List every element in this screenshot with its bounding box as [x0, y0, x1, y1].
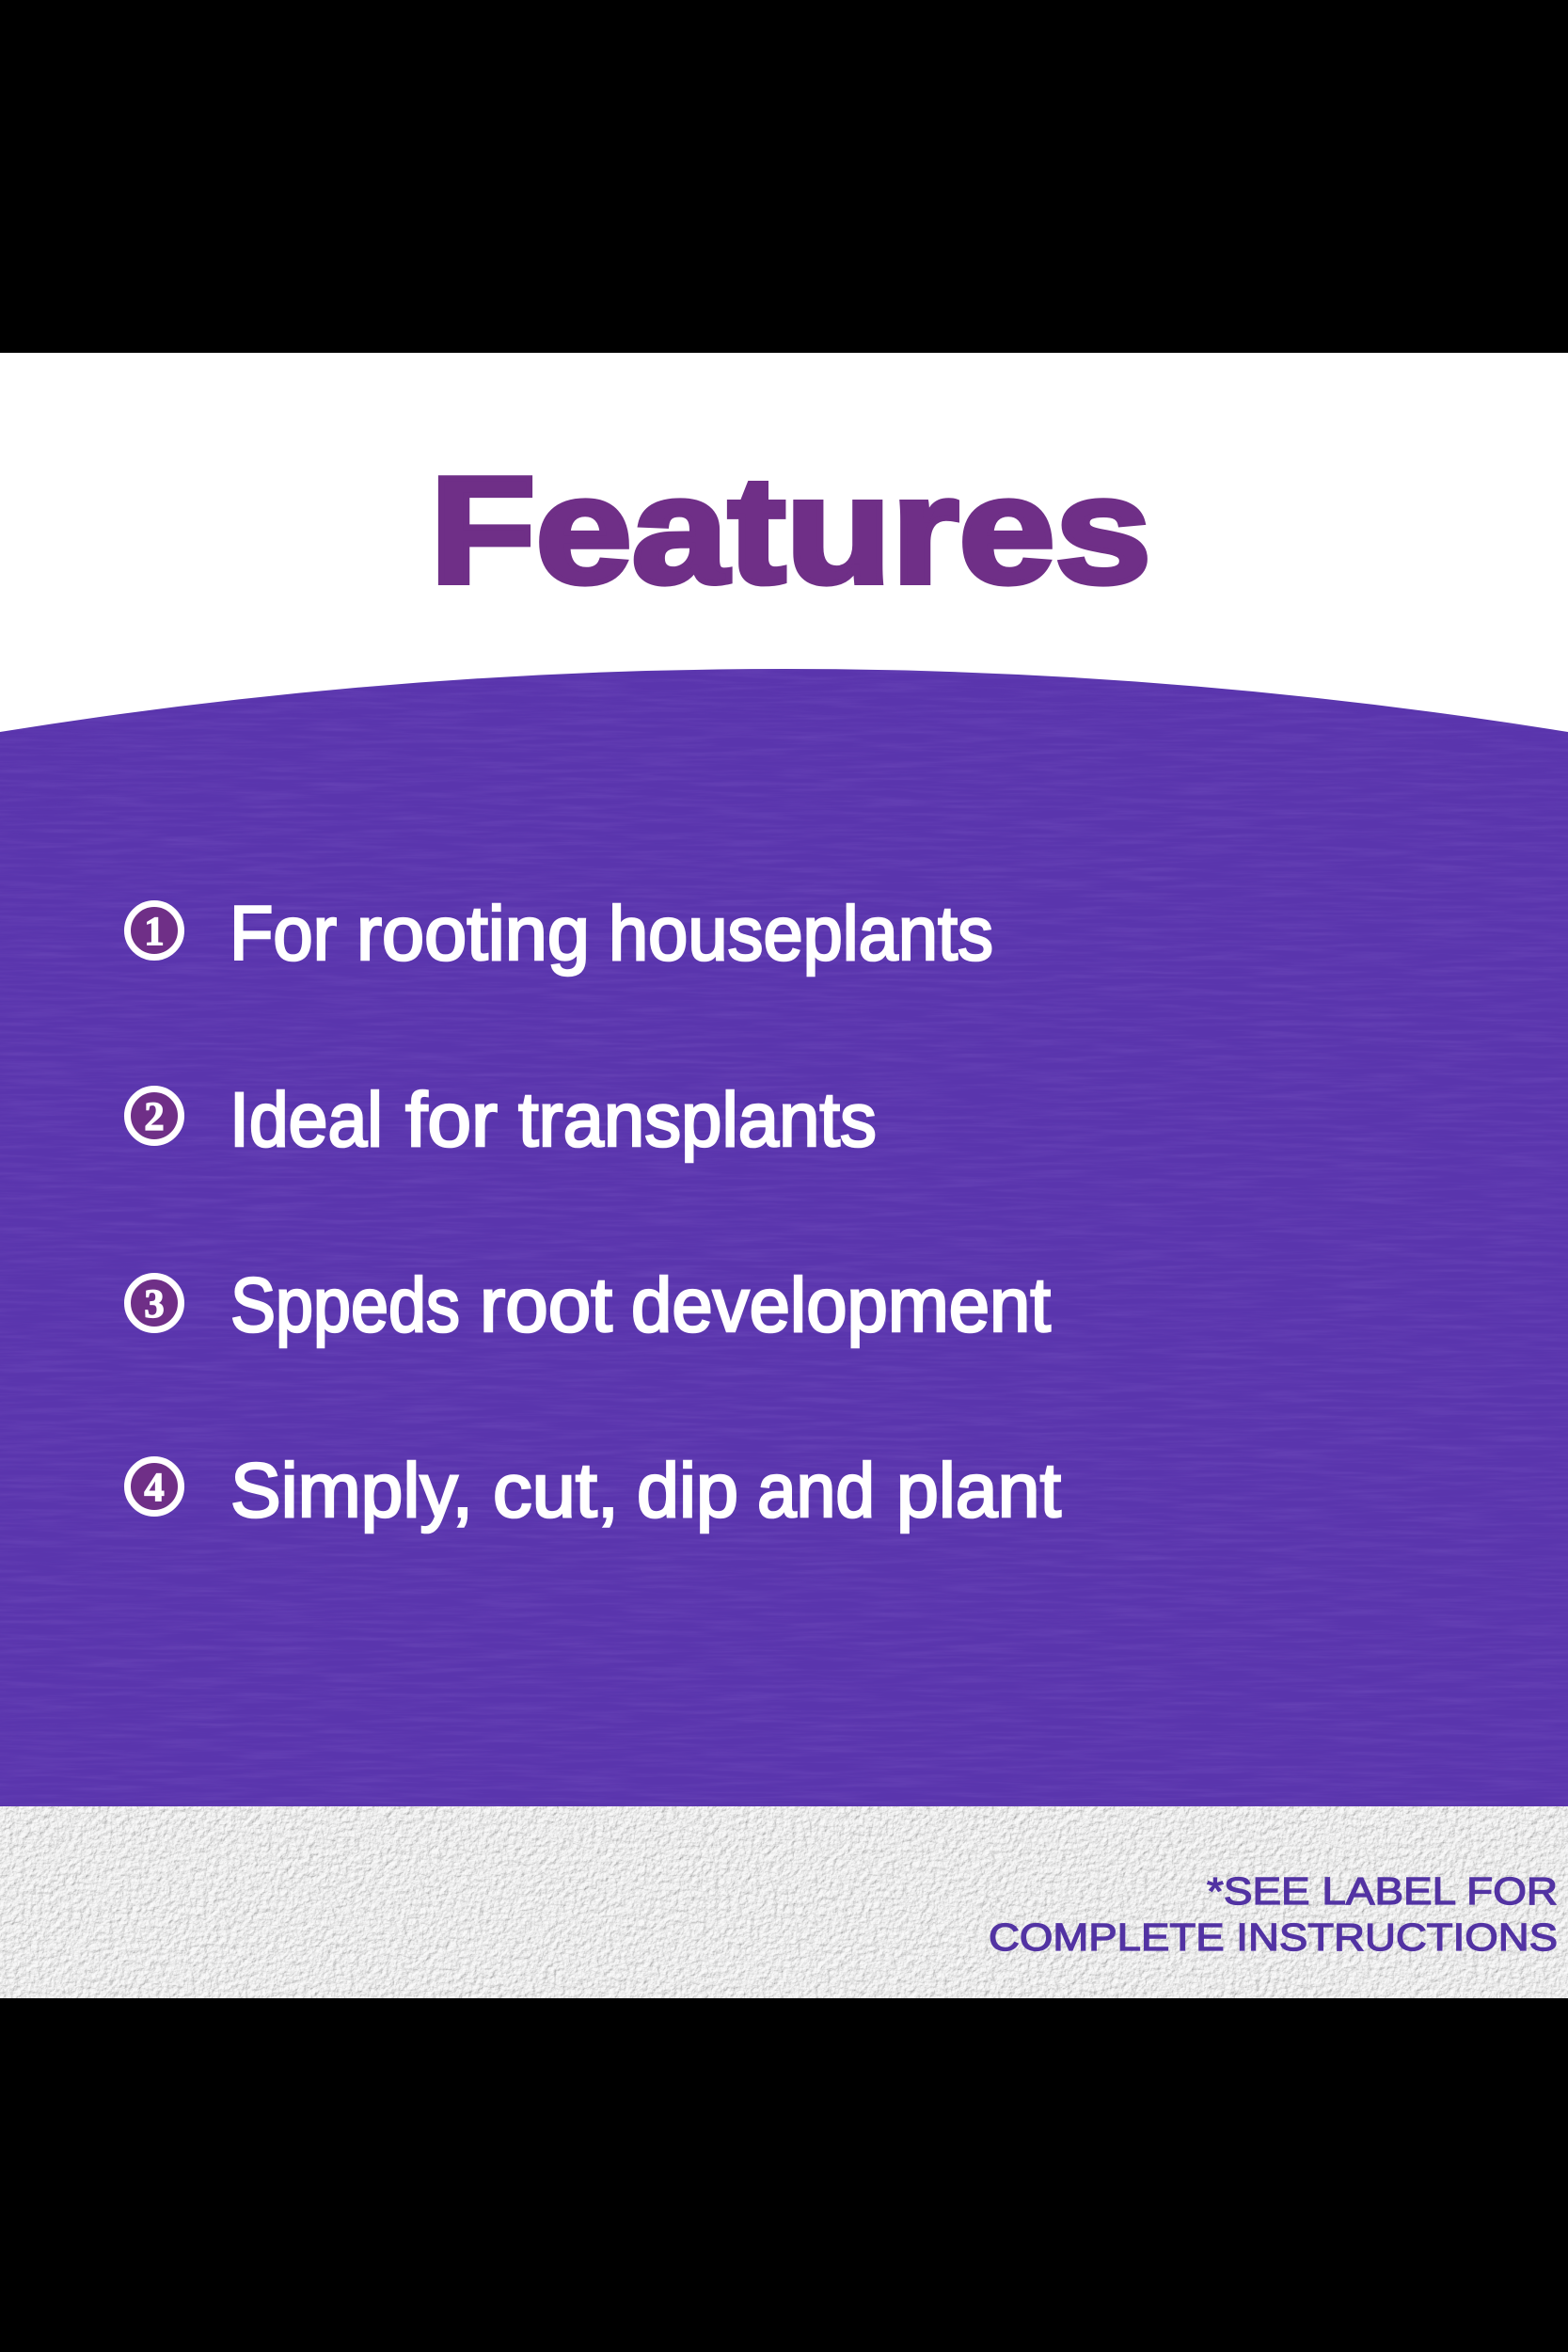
feature text 4: plant — [896, 1448, 1061, 1534]
panel: purple features panel — [0, 659, 1568, 1806]
feature text 4: Simply, — [230, 1448, 473, 1534]
feature text 2 — [230, 1077, 877, 1163]
feature text 3 — [230, 1263, 1051, 1348]
white header background — [0, 353, 1568, 748]
feature text 2: Ideal — [230, 1077, 383, 1163]
feature 2 — [128, 1077, 877, 1163]
icon: number 1 badge: 1 — [144, 910, 165, 954]
footnote: *SEE LABEL FOR — [1207, 1869, 1558, 1913]
feature text 4: dip — [637, 1448, 738, 1534]
footnote: COMPLETE INSTRUCTIONS — [989, 1915, 1558, 1959]
icon: number 2 badge — [128, 1089, 181, 1142]
icon: number 3 badge — [128, 1276, 181, 1330]
icon: number 2 badge: 2 — [144, 1095, 165, 1139]
feature text 1: rooting — [356, 891, 590, 977]
feature 4 — [128, 1448, 1061, 1534]
feature text 2: for — [405, 1077, 498, 1163]
panel: textured footer band — [0, 1806, 1568, 1998]
feature 3 — [128, 1263, 1051, 1348]
feature text 2: transplants — [518, 1077, 877, 1163]
title: Features — [430, 446, 1151, 615]
feature text 3: development — [631, 1263, 1051, 1348]
icon: number 1 badge — [128, 903, 181, 958]
feature text 1: For — [230, 891, 337, 977]
footnote — [989, 1869, 1558, 1959]
feature text 4 — [230, 1448, 1061, 1534]
feature text 3: root — [480, 1263, 612, 1348]
icon: number 4 badge: 4 — [144, 1466, 165, 1510]
feature text 4: and — [757, 1448, 875, 1534]
feature text 3: Sppeds — [230, 1263, 460, 1348]
feature text 1: houseplants — [609, 891, 993, 977]
icon: number 4 badge — [128, 1460, 181, 1513]
feature text 1 — [230, 891, 993, 977]
icon: number 3 badge: 3 — [144, 1282, 165, 1327]
feature 1 — [128, 891, 993, 977]
feature text 4: cut, — [493, 1448, 619, 1534]
